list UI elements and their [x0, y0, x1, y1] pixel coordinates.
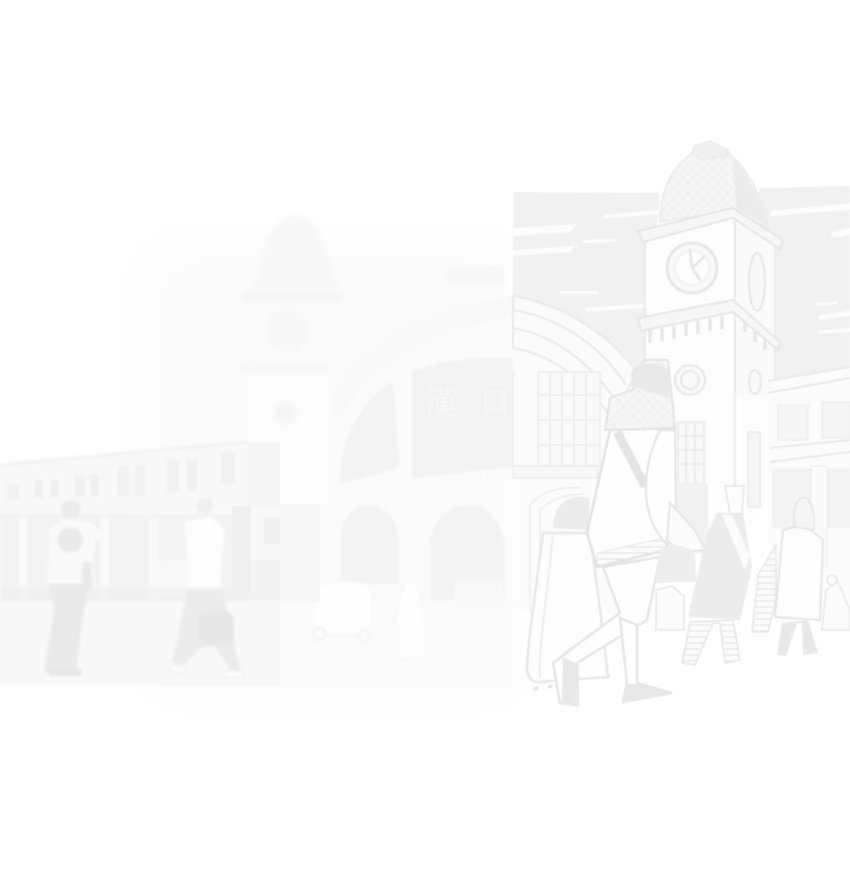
window grid under the arch: [513, 372, 600, 610]
dome: [660, 141, 768, 228]
figure: woman in long coat: [775, 497, 823, 656]
lower cornice with brackets: [638, 300, 780, 350]
tower lower windows: [672, 422, 760, 554]
sky with cloud streaks: [513, 186, 850, 380]
hood and mask: [605, 360, 675, 430]
photo: white cart: [313, 581, 372, 642]
sign characters on the hall window: 漢: [425, 385, 457, 421]
figure: traveller seen from behind: [553, 360, 705, 705]
sign characters on the hall window: [425, 385, 510, 421]
arch of the station hall: [513, 296, 637, 420]
round windows: [675, 365, 761, 395]
station hall wall below the arch: [513, 296, 640, 612]
clock face: [667, 243, 717, 293]
photo: man with camera: [44, 500, 106, 676]
illustration panel: station and travellers, right: [513, 141, 850, 705]
tower body: [645, 215, 775, 540]
photo: person in white: [396, 580, 426, 660]
top cornice: [638, 208, 783, 249]
sign characters on the hall window: 口: [480, 386, 510, 419]
figure: instrument case: [527, 497, 608, 690]
bag: [655, 545, 696, 583]
side clock face: [749, 253, 765, 311]
photo panel: blurred station hall, centre: [150, 214, 515, 690]
photo panel: colonnade and two people, left: [0, 442, 320, 685]
legs: [553, 557, 660, 705]
background crowd: [656, 545, 850, 632]
right wing of the station: [768, 366, 850, 620]
jacket: [587, 428, 675, 567]
photo: faded arch facade: [330, 266, 513, 610]
photo: woman walking: [169, 498, 244, 678]
satchel: [667, 503, 705, 552]
photo: upper storey with windows: [0, 442, 247, 520]
clock tower: [638, 141, 783, 554]
photo: colonnade: [0, 514, 250, 602]
photo: tower base: [232, 442, 320, 602]
photo: faded clock tower: [238, 214, 342, 503]
figure: commuter in dark coat: [682, 486, 752, 665]
